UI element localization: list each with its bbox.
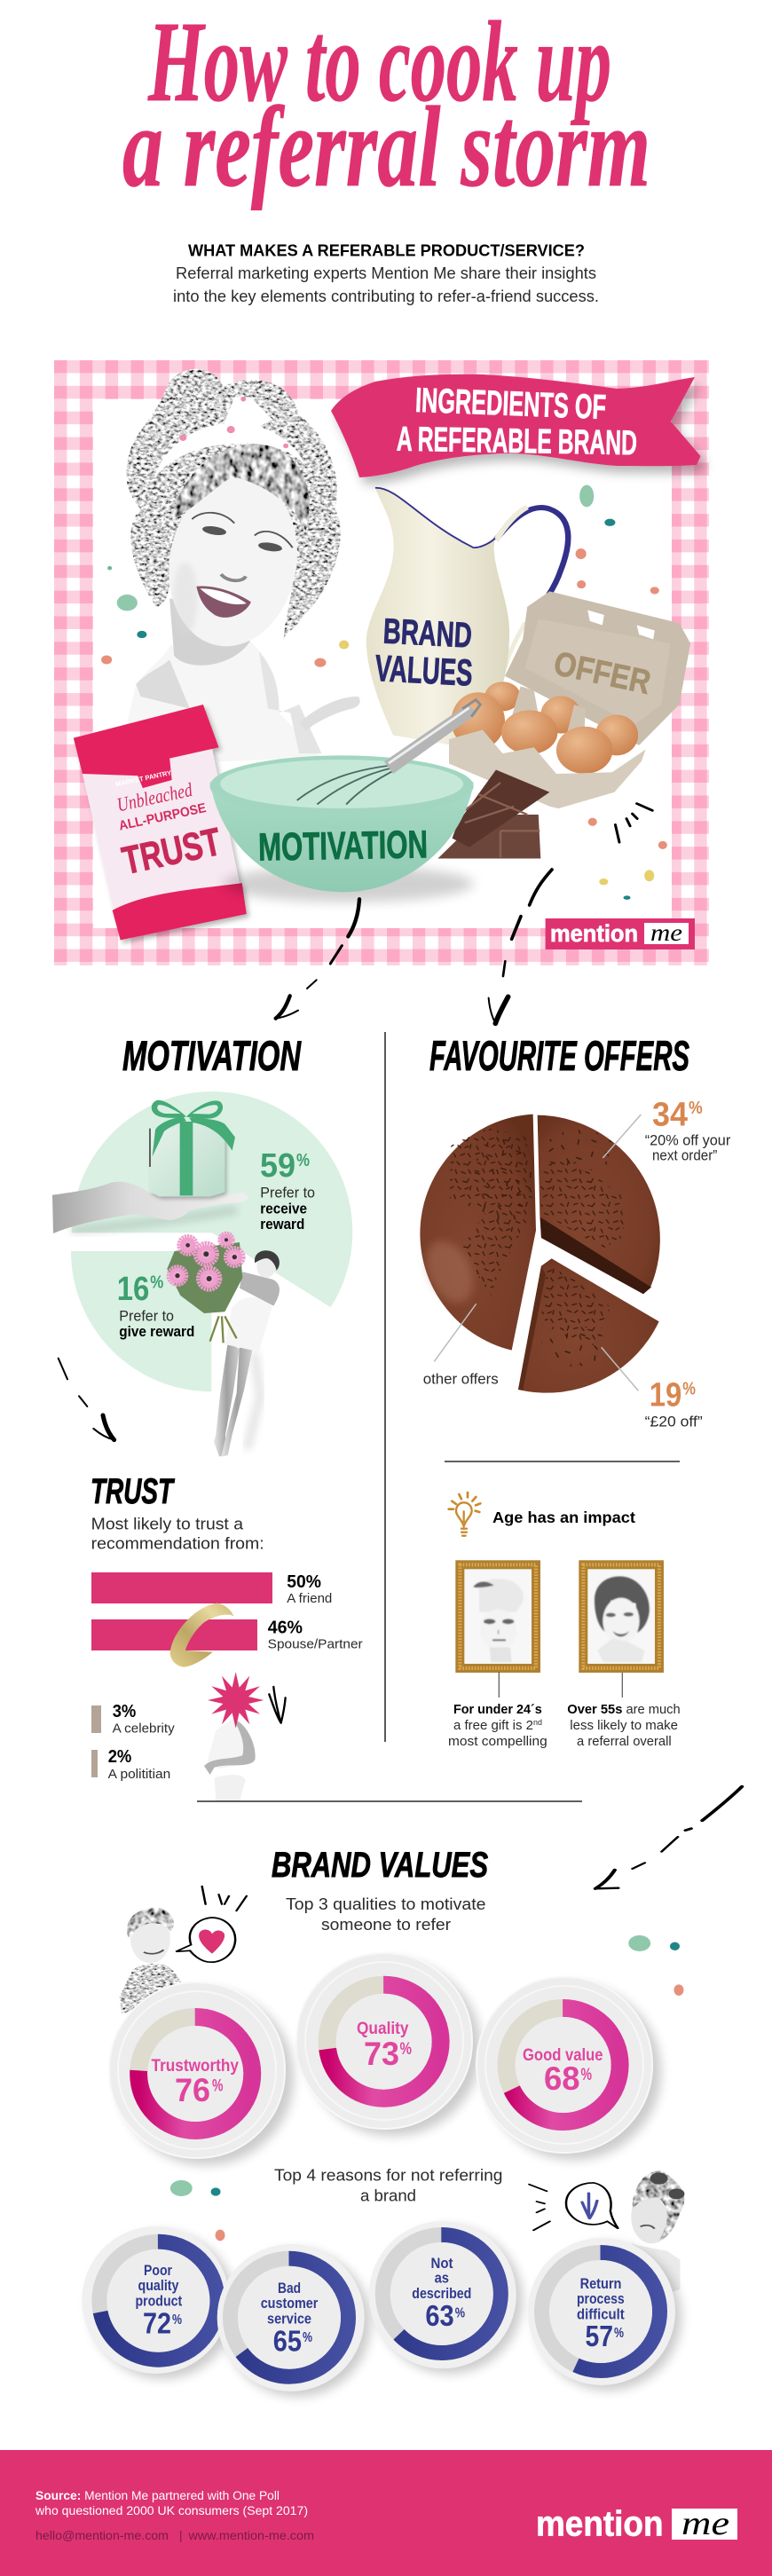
stat: 16%: % (150, 1273, 163, 1293)
plate: not as described 63% (369, 2221, 523, 2374)
confetti (628, 1935, 683, 1996)
photo: flour bag (74, 705, 247, 940)
caption: over 55s: less likely to make (570, 1718, 678, 1733)
plate: bad customer service 65%: service (267, 2311, 311, 2327)
photo: mint bowl and whisk (209, 699, 480, 892)
illustration: woman and ingredients (74, 369, 690, 940)
stat: 59%: receive (260, 1201, 307, 1217)
plate: poor quality product 72%: product (135, 2293, 183, 2309)
logo: mention me (hero) (546, 918, 695, 949)
source text: Source: Mention Me partnered with One Poll (35, 2489, 280, 2502)
panel: brand values (82, 1786, 742, 2397)
trust intro text (91, 1515, 264, 1553)
source text: who questioned 2000 UK consumers (Sept 2017) (35, 2504, 308, 2517)
photo: hand holding gift (52, 1100, 248, 1233)
stat: 19% (645, 1376, 703, 1430)
bar: a politician (91, 1750, 98, 1777)
logo: mention me (536, 2505, 737, 2544)
stat: 16%: give reward (119, 1324, 194, 1340)
contact details: www.mention-me.com (187, 2529, 314, 2542)
trust intro text: recommendation from: (91, 1535, 264, 1553)
photo: worried woman with down arrow bubble (529, 2170, 684, 2296)
icon: starburst (208, 1672, 264, 1729)
divider (197, 1800, 582, 1802)
label: 2% a politician (108, 1747, 170, 1782)
plate: trustworthy 76%: Trustworthy (151, 2057, 239, 2076)
plate: bad customer service 65%: 65 (273, 2324, 302, 2357)
text: top 4 reasons: a brand (360, 2187, 416, 2205)
stat: 16%: Prefer to (119, 1308, 174, 1324)
plate: poor quality product 72% (82, 2226, 236, 2379)
plate: return process difficult 57%: 57 (586, 2320, 613, 2352)
plate: good value 68%: Good value (523, 2046, 603, 2065)
label: 2% a politician: 2% (108, 1747, 131, 1767)
label: 50% a friend: 50% (287, 1572, 321, 1592)
plate: quality 73%: % (399, 2040, 412, 2059)
plate: return process difficult 57%: Return (580, 2276, 621, 2292)
plate: poor quality product 72%: Poor (144, 2263, 172, 2279)
label: 2% a politician: A polititian (108, 1768, 170, 1782)
caption: under 24s: a free gift is 2 (453, 1718, 533, 1733)
plate: good value 68% (477, 1977, 661, 2160)
stat: 59% (260, 1147, 315, 1233)
gingham frame (54, 360, 709, 965)
contact details (35, 2529, 314, 2542)
jug label: VALUES (374, 647, 474, 694)
stat: 59%: 59 (260, 1147, 295, 1185)
contact details: | (179, 2529, 183, 2542)
text: top 3 qualities (286, 1895, 486, 1934)
label: 50% a friend (287, 1572, 332, 1606)
footer background (0, 2450, 772, 2576)
stat: 19%: “£20 off” (645, 1413, 703, 1430)
icon: light bulb (449, 1493, 480, 1536)
bar: spouse/partner (91, 1619, 257, 1650)
intro text: WHAT MAKES A REFERABLE PRODUCT/SERVICE? (188, 241, 585, 259)
logo: mention me: me (681, 2505, 729, 2542)
stat: 59%: % (296, 1151, 310, 1170)
stat: 19%: % (682, 1380, 696, 1399)
plate: poor quality product 72%: quality (138, 2278, 179, 2294)
plate: quality 73% (296, 1953, 481, 2136)
label: 3% a celebrity: 3% (113, 1702, 136, 1721)
plate: bad customer service 65% (217, 2244, 371, 2397)
bar: a celebrity (91, 1706, 101, 1733)
pie slice: receive reward (72, 1091, 352, 1307)
flour bag labels: Unbleached (115, 778, 195, 815)
photo: egg carton (449, 591, 690, 808)
plate: bad customer service 65%: Bad (278, 2281, 301, 2296)
heading: motivation: MOTIVATION (122, 1032, 302, 1079)
label: 46% spouse/partner: 46% (268, 1619, 303, 1638)
photo: chocolate bar (437, 769, 549, 859)
photo: woman with starburst head (204, 1719, 256, 1801)
pie slice: give reward (71, 1251, 211, 1391)
plate: return process difficult 57%: difficult (577, 2306, 625, 2322)
plate: not as described 63%: % (455, 2306, 465, 2321)
plate: poor quality product 72%: 72 (143, 2306, 171, 2339)
stat: 59%: Prefer to (260, 1185, 315, 1201)
cake slice: 19% (518, 1258, 659, 1393)
leader lines (434, 1115, 641, 1390)
stat: 19%: 19 (650, 1376, 681, 1414)
intro text (173, 241, 599, 305)
intro text: Referral marketing experts Mention Me share their insights (176, 264, 596, 282)
flour bag labels (106, 761, 225, 883)
label: other offers: other offers (423, 1370, 499, 1387)
plate: quality 73%: Quality (357, 2020, 409, 2038)
contact details: hello@mention-me.com (35, 2529, 169, 2542)
arrow: to brand values (595, 1786, 742, 1888)
stat: 34% (645, 1096, 731, 1163)
text: top 3 qualities: someone to refer (321, 1916, 451, 1934)
divider (445, 1461, 680, 1462)
stat: 16% (117, 1271, 194, 1340)
label: 3% a celebrity (113, 1702, 175, 1737)
footer (0, 2450, 772, 2576)
frame: under 24s (460, 1564, 536, 1668)
connector lines (499, 1672, 622, 1698)
confetti dots (101, 485, 667, 900)
plate: good value 68%: 68 (544, 2060, 580, 2097)
trust intro text: Most likely to trust a (91, 1515, 244, 1532)
jug label (374, 611, 476, 694)
label: 3% a celebrity: A celebrity (113, 1722, 175, 1737)
text: top 3 qualities: Top 3 qualities to motivate (286, 1895, 486, 1913)
banner: ingredients of a referable brand (331, 374, 701, 477)
heading: trust: TRUST (91, 1472, 175, 1511)
stat: 34%: next order” (652, 1146, 718, 1163)
plate: poor quality product 72%: % (172, 2312, 182, 2328)
heading: age has an impact: Age has an impact (492, 1509, 635, 1526)
caption: under 24s: most compelling (448, 1734, 547, 1749)
plate: quality 73%: 73 (364, 2036, 399, 2072)
source text (35, 2489, 308, 2517)
stat: 59%: reward (260, 1217, 304, 1233)
plate: return process difficult 57%: process (577, 2291, 625, 2307)
bar: a friend (91, 1572, 272, 1603)
plate: bad customer service 65%: % (303, 2330, 312, 2345)
confetti (170, 2180, 225, 2241)
text: top 4 reasons: Top 4 reasons for not referring (274, 2166, 502, 2184)
plate: good value 68%: % (580, 2066, 592, 2084)
panel: age has an impact (448, 1493, 681, 1749)
jug label: BRAND (382, 611, 473, 656)
caption: over 55s: Over 55s are much (567, 1702, 681, 1717)
brush ticks near carton (615, 804, 652, 842)
arrow: motivation to trust (59, 1359, 114, 1440)
arrow: hero to favourite offers (489, 870, 552, 1023)
photo: smiling woman (126, 369, 360, 761)
photo: pin-up woman with bouquet (167, 1234, 280, 1457)
panel: motivation (52, 1032, 352, 1457)
icon: gold ring (170, 1603, 234, 1667)
stat: 34%: “20% off your (645, 1132, 731, 1149)
arrow: down (269, 1687, 286, 1723)
plate: return process difficult 57%: % (614, 2326, 624, 2341)
column divider (384, 1032, 386, 1742)
plate: bad customer service 65%: customer (261, 2296, 319, 2312)
plate: not as described 63%: described (412, 2286, 471, 2302)
flour bag labels: TRUST (118, 820, 225, 883)
intro text: into the key elements contributing to refer-a-friend success. (173, 287, 599, 305)
stat: 34%: % (689, 1099, 703, 1118)
panel: trust (91, 1472, 363, 1801)
plate: trustworthy 76%: 76 (175, 2072, 210, 2108)
label: 50% a friend: A friend (287, 1592, 332, 1606)
carton label: OFFER (550, 645, 654, 702)
caption: over 55s: a referral overall (577, 1734, 672, 1749)
label: 46% spouse/partner: Spouse/Partner (268, 1637, 363, 1651)
plate: not as described 63%: as (435, 2271, 449, 2287)
plate: not as described 63%: Not (431, 2256, 453, 2272)
panel: favourite offers (417, 1032, 731, 1430)
flour bag labels: MARKET PANTRY (114, 768, 172, 788)
photo: enamel jug (366, 488, 568, 747)
plate: trustworthy 76% (109, 1982, 294, 2165)
banner: ingredients of a referable brand: INGREDIENTS OF (414, 382, 607, 427)
logo: mention me: mention (536, 2505, 664, 2544)
logo: mention me (hero): mention (550, 920, 638, 947)
plate: not as described 63%: 63 (425, 2299, 454, 2332)
shadow under bowl (224, 865, 474, 902)
stat: 34%: 34 (652, 1096, 688, 1133)
caption: under 24s: For under 24´s (453, 1702, 542, 1717)
caption: under 24s: nd (533, 1718, 542, 1727)
bar chart (91, 1572, 286, 1801)
photo: happy woman with heart bubble (120, 1887, 247, 2014)
arrow: hero to motivation (276, 899, 359, 1019)
flour bag labels: ALL-PURPOSE (117, 800, 208, 834)
text: top 4 reasons (274, 2166, 502, 2205)
cake slice: 34% (538, 1115, 660, 1294)
label: 46% spouse/partner (268, 1619, 363, 1651)
pie chart: chocolate cake (417, 1115, 660, 1393)
frame: over 55s (583, 1564, 659, 1668)
cake slice: other offers (417, 1115, 536, 1351)
logo: mention me (hero): me (650, 919, 682, 946)
plate: trustworthy 76%: % (212, 2077, 224, 2096)
caption: over 55s (567, 1702, 681, 1749)
plate: return process difficult 57% (528, 2238, 681, 2391)
title (122, 0, 650, 211)
banner: ingredients of a referable brand: A REFERABLE BRAND (397, 421, 637, 462)
panel: ingredients hero (54, 360, 709, 965)
stat: 16%: 16 (117, 1271, 149, 1308)
heading: brand values: BRAND VALUES (272, 1846, 488, 1885)
caption: under 24s (448, 1702, 547, 1749)
bowl label: MOTIVATION (258, 823, 428, 870)
pie chart and photos (52, 1091, 352, 1457)
